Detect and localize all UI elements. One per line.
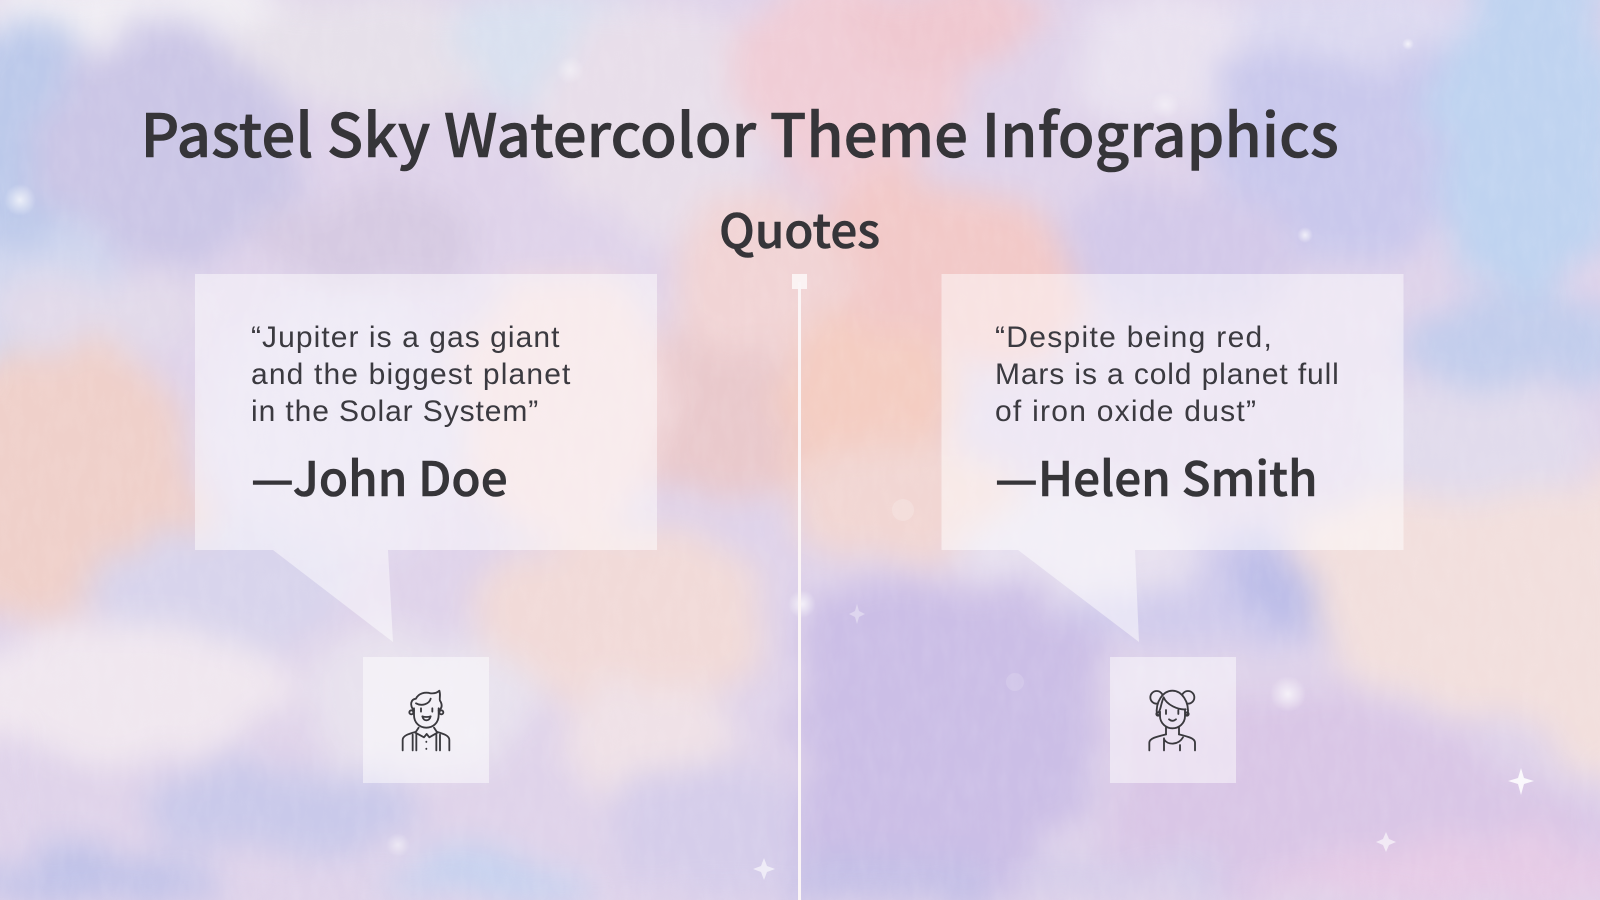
author: Helen Smith: —Helen Smith: [995, 441, 1318, 510]
quote: Mars: Mars is a cold planet full: [995, 358, 1340, 390]
icon tile: man: [363, 657, 489, 783]
quote: Mars: “Despite being red,: [995, 320, 1273, 354]
icon: woman avatar: [1148, 690, 1196, 752]
author: John Doe: —John Doe: [251, 441, 508, 510]
quote: Jupiter: [251, 320, 572, 428]
quote: Jupiter: in the Solar System”: [251, 394, 539, 428]
quote: Jupiter: “Jupiter is a gas giant: [251, 320, 561, 354]
icon: man avatar: [402, 690, 450, 752]
subtitle: Quotes: Quotes: [719, 193, 880, 262]
panel: right speech bubble: [942, 274, 1404, 642]
quote: Mars: of iron oxide dust”: [995, 394, 1257, 428]
panel: left speech bubble: [195, 274, 657, 642]
icon tile: woman: [1110, 657, 1236, 783]
quote: Mars: [995, 320, 1340, 428]
title: Pastel Sky Watercolor Theme Infographics: [140, 88, 1339, 175]
center timeline line: [792, 274, 807, 900]
quote: Jupiter: and the biggest planet: [251, 358, 572, 390]
